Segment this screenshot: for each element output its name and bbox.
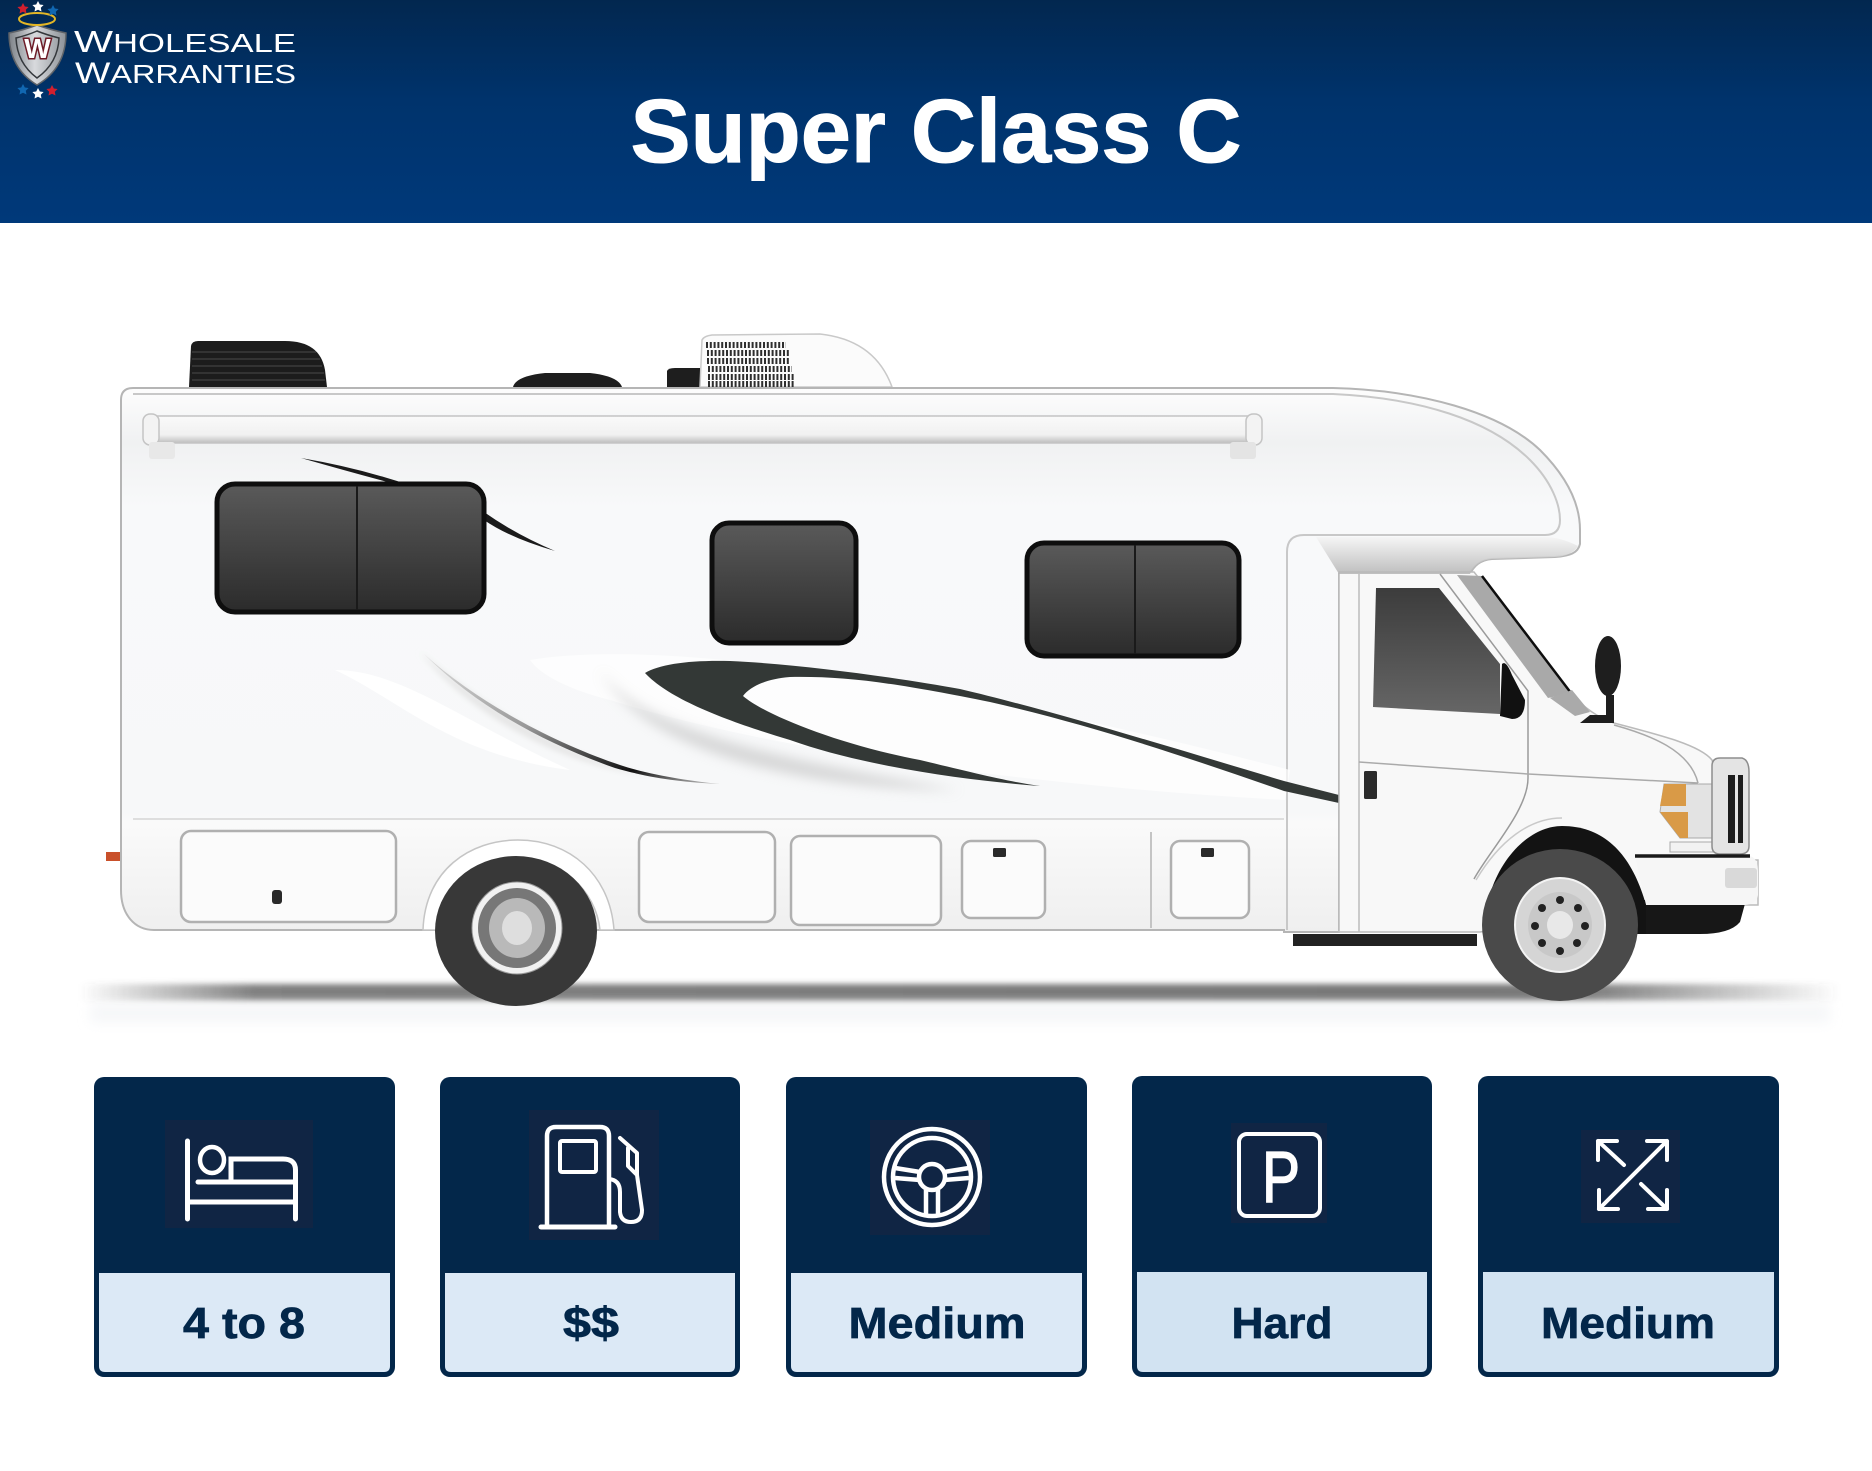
card: driving difficulty xyxy=(786,1077,1087,1377)
side mirror xyxy=(1550,636,1621,723)
overhang underside xyxy=(1316,537,1578,574)
windows xyxy=(217,484,1239,656)
door handle xyxy=(1364,771,1377,799)
door four xyxy=(962,841,1045,918)
stat cards xyxy=(94,1076,1779,1377)
rooftop equipment xyxy=(189,334,892,387)
door five xyxy=(1171,841,1249,918)
door three xyxy=(791,836,941,925)
ground shadow xyxy=(80,984,1840,1023)
header band xyxy=(0,0,1872,223)
headlight xyxy=(1660,784,1717,852)
under bumper xyxy=(1640,900,1746,934)
value: Medium xyxy=(1541,1299,1715,1348)
door locks xyxy=(272,832,1214,928)
title: Super Class C xyxy=(630,82,1242,182)
logo wordmark xyxy=(74,24,296,90)
logo wordmark: W HOLESALE xyxy=(74,24,296,59)
window right xyxy=(1027,543,1239,656)
door mirror xyxy=(1500,663,1525,719)
logo xyxy=(9,1,296,98)
tail light xyxy=(106,852,120,861)
cab xyxy=(1316,537,1758,932)
awning xyxy=(143,414,1262,459)
icon: bed xyxy=(165,1120,313,1228)
icon: parking xyxy=(1231,1123,1327,1223)
window left xyxy=(217,484,484,612)
door two xyxy=(639,832,775,922)
logo wordmark: W ARRANTIES xyxy=(75,57,296,90)
card: size xyxy=(1478,1076,1779,1377)
icon: fuel pump xyxy=(529,1110,659,1240)
value: 4 to 8 xyxy=(183,1299,305,1348)
logo shield xyxy=(9,1,66,98)
door one xyxy=(181,831,396,922)
cab side window xyxy=(1373,588,1500,714)
icon: steering wheel xyxy=(870,1120,990,1235)
window middle xyxy=(712,523,856,643)
value: $$ xyxy=(563,1299,619,1348)
upper window stripes xyxy=(301,458,555,551)
card: parking xyxy=(1132,1076,1432,1377)
soft swoosh highlights xyxy=(335,652,1290,800)
bumper xyxy=(1635,856,1758,905)
coach body xyxy=(121,388,1580,932)
logo shield: W xyxy=(24,33,51,64)
value: Hard xyxy=(1232,1299,1332,1348)
icon: parking: P xyxy=(1262,1138,1300,1218)
main swoosh xyxy=(645,661,1339,803)
card: fuel cost xyxy=(440,1077,740,1377)
lower body seam xyxy=(133,818,1284,820)
thin rear stripe xyxy=(424,654,720,784)
front end xyxy=(1635,758,1758,934)
RV illustration xyxy=(80,334,1840,1023)
value: Medium xyxy=(848,1299,1026,1348)
storage doors xyxy=(181,831,1249,925)
grille xyxy=(1712,758,1749,854)
side graphics xyxy=(335,652,1339,803)
running board xyxy=(1293,934,1477,946)
rear wheel xyxy=(423,840,614,1006)
card: sleeps xyxy=(94,1077,395,1377)
icon: expand arrows xyxy=(1581,1130,1680,1223)
overhang inner contour xyxy=(133,394,1560,930)
windshield strip xyxy=(1457,575,1571,698)
front wheel xyxy=(1476,818,1646,1001)
